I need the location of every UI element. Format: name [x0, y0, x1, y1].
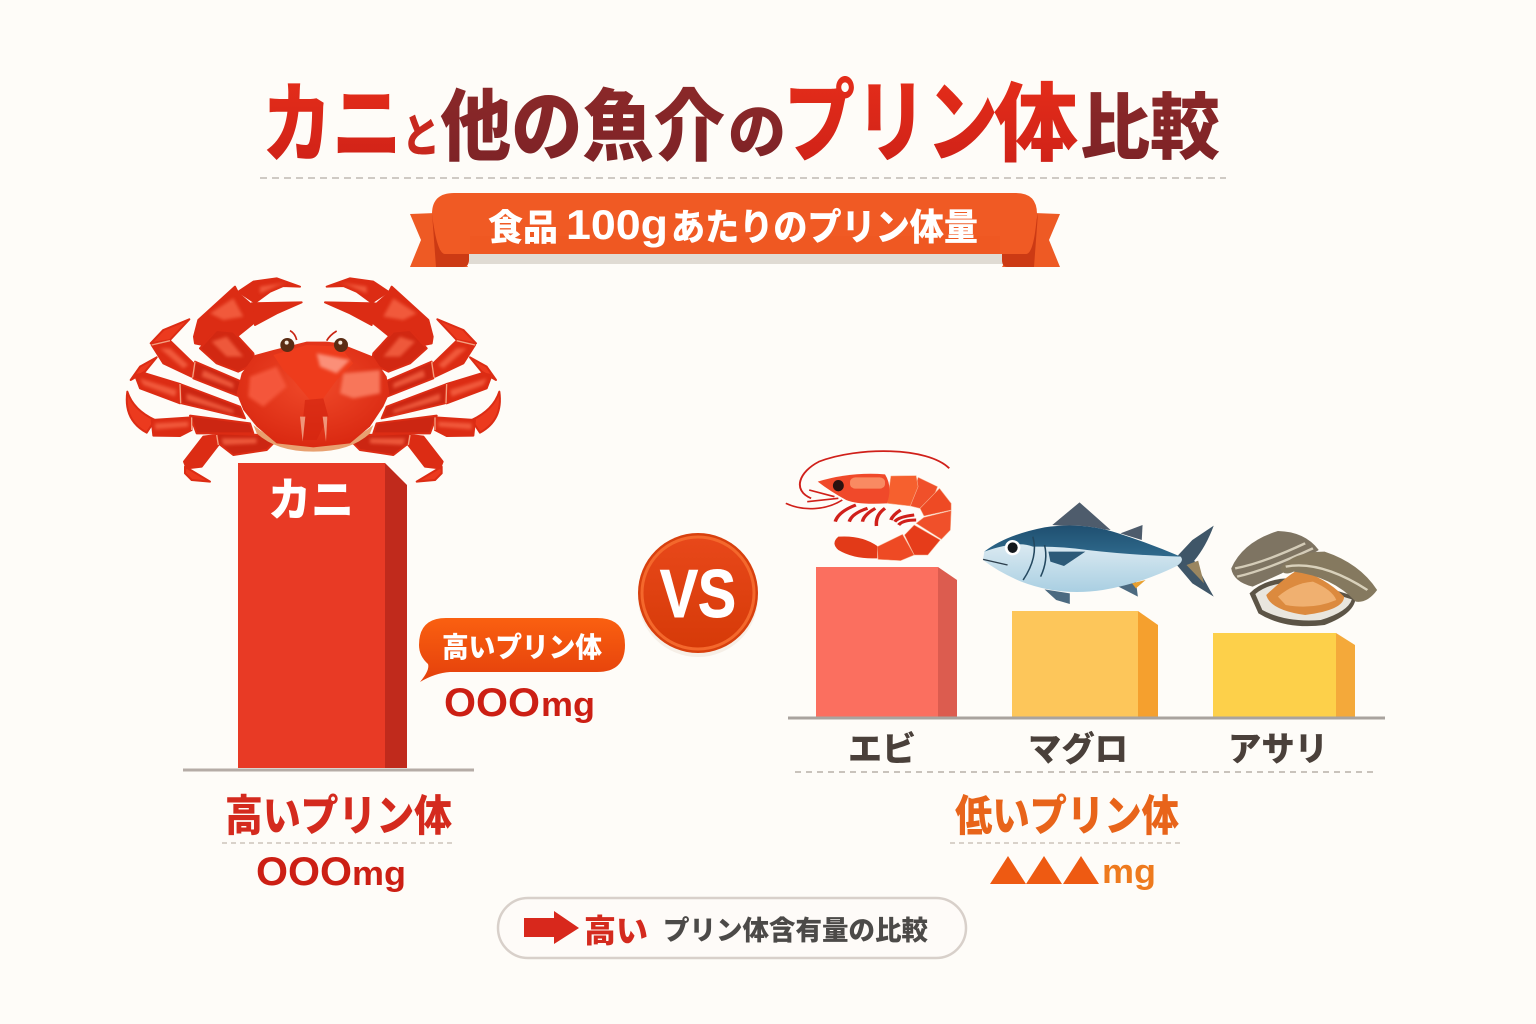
title: 他の魚介 [440, 65, 725, 177]
title: プリン [784, 50, 998, 180]
icon: shrimp [786, 451, 951, 561]
icon: crab [127, 278, 500, 482]
high purine label: mg [352, 855, 406, 893]
title: カニ [262, 54, 402, 181]
VS badge: VS [660, 556, 736, 632]
label: clam: アサリ [1228, 722, 1328, 771]
high purine label: 高いプリン体 [225, 782, 452, 844]
VS badge [638, 533, 758, 657]
title: 比較 [1080, 69, 1220, 174]
icon: arrow [524, 911, 579, 944]
legend pill: 高い [584, 906, 648, 952]
label: tuna: マグロ [1028, 722, 1128, 771]
callout: high purine [419, 618, 625, 725]
callout: high purine: mg [541, 686, 595, 724]
callout: high purine: 高いプリン体 [442, 626, 602, 666]
bar: shrimp [816, 567, 957, 717]
icon: tuna [983, 502, 1214, 604]
ribbon label: 食品 [488, 199, 558, 251]
ribbon banner [410, 193, 1060, 267]
low purine label: 低いプリン体 [955, 782, 1179, 844]
ribbon label: 100g [566, 201, 668, 248]
bar: crab [238, 463, 407, 768]
label: shrimp: エビ [848, 722, 916, 771]
title: の [728, 84, 786, 171]
high purine label [222, 782, 455, 894]
ribbon label [488, 197, 978, 251]
low purine label: mg [1102, 853, 1156, 891]
legend pill [498, 898, 966, 958]
legend pill: プリン体含有量の比較 [663, 909, 928, 948]
ribbon label: あたりのプリン体量 [671, 197, 978, 251]
title: と [402, 100, 440, 166]
title [262, 50, 1220, 181]
bar: clam [1213, 633, 1355, 717]
bar: tuna [1012, 611, 1158, 717]
title: 体 [994, 54, 1078, 179]
high purine label: OOO [256, 850, 352, 894]
low purine label [950, 782, 1180, 891]
bar label: crab: カニ [268, 464, 354, 530]
icon: clams [1231, 531, 1377, 626]
callout: high purine: OOO [444, 681, 540, 725]
